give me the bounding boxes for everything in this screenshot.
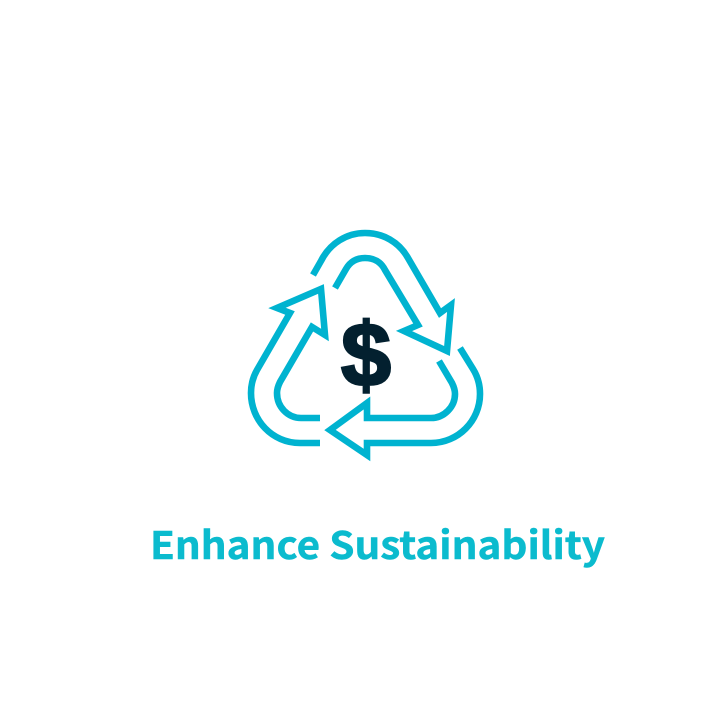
- title: Enhance Sustainability: [150, 515, 605, 570]
- icon: recycling arrows with dollar sign: [251, 233, 480, 455]
- arrow: top right: [313, 233, 451, 351]
- arrow: bottom: [330, 348, 480, 455]
- arrow: left: [251, 289, 325, 443]
- icon: dollar sign: $: [341, 306, 391, 406]
